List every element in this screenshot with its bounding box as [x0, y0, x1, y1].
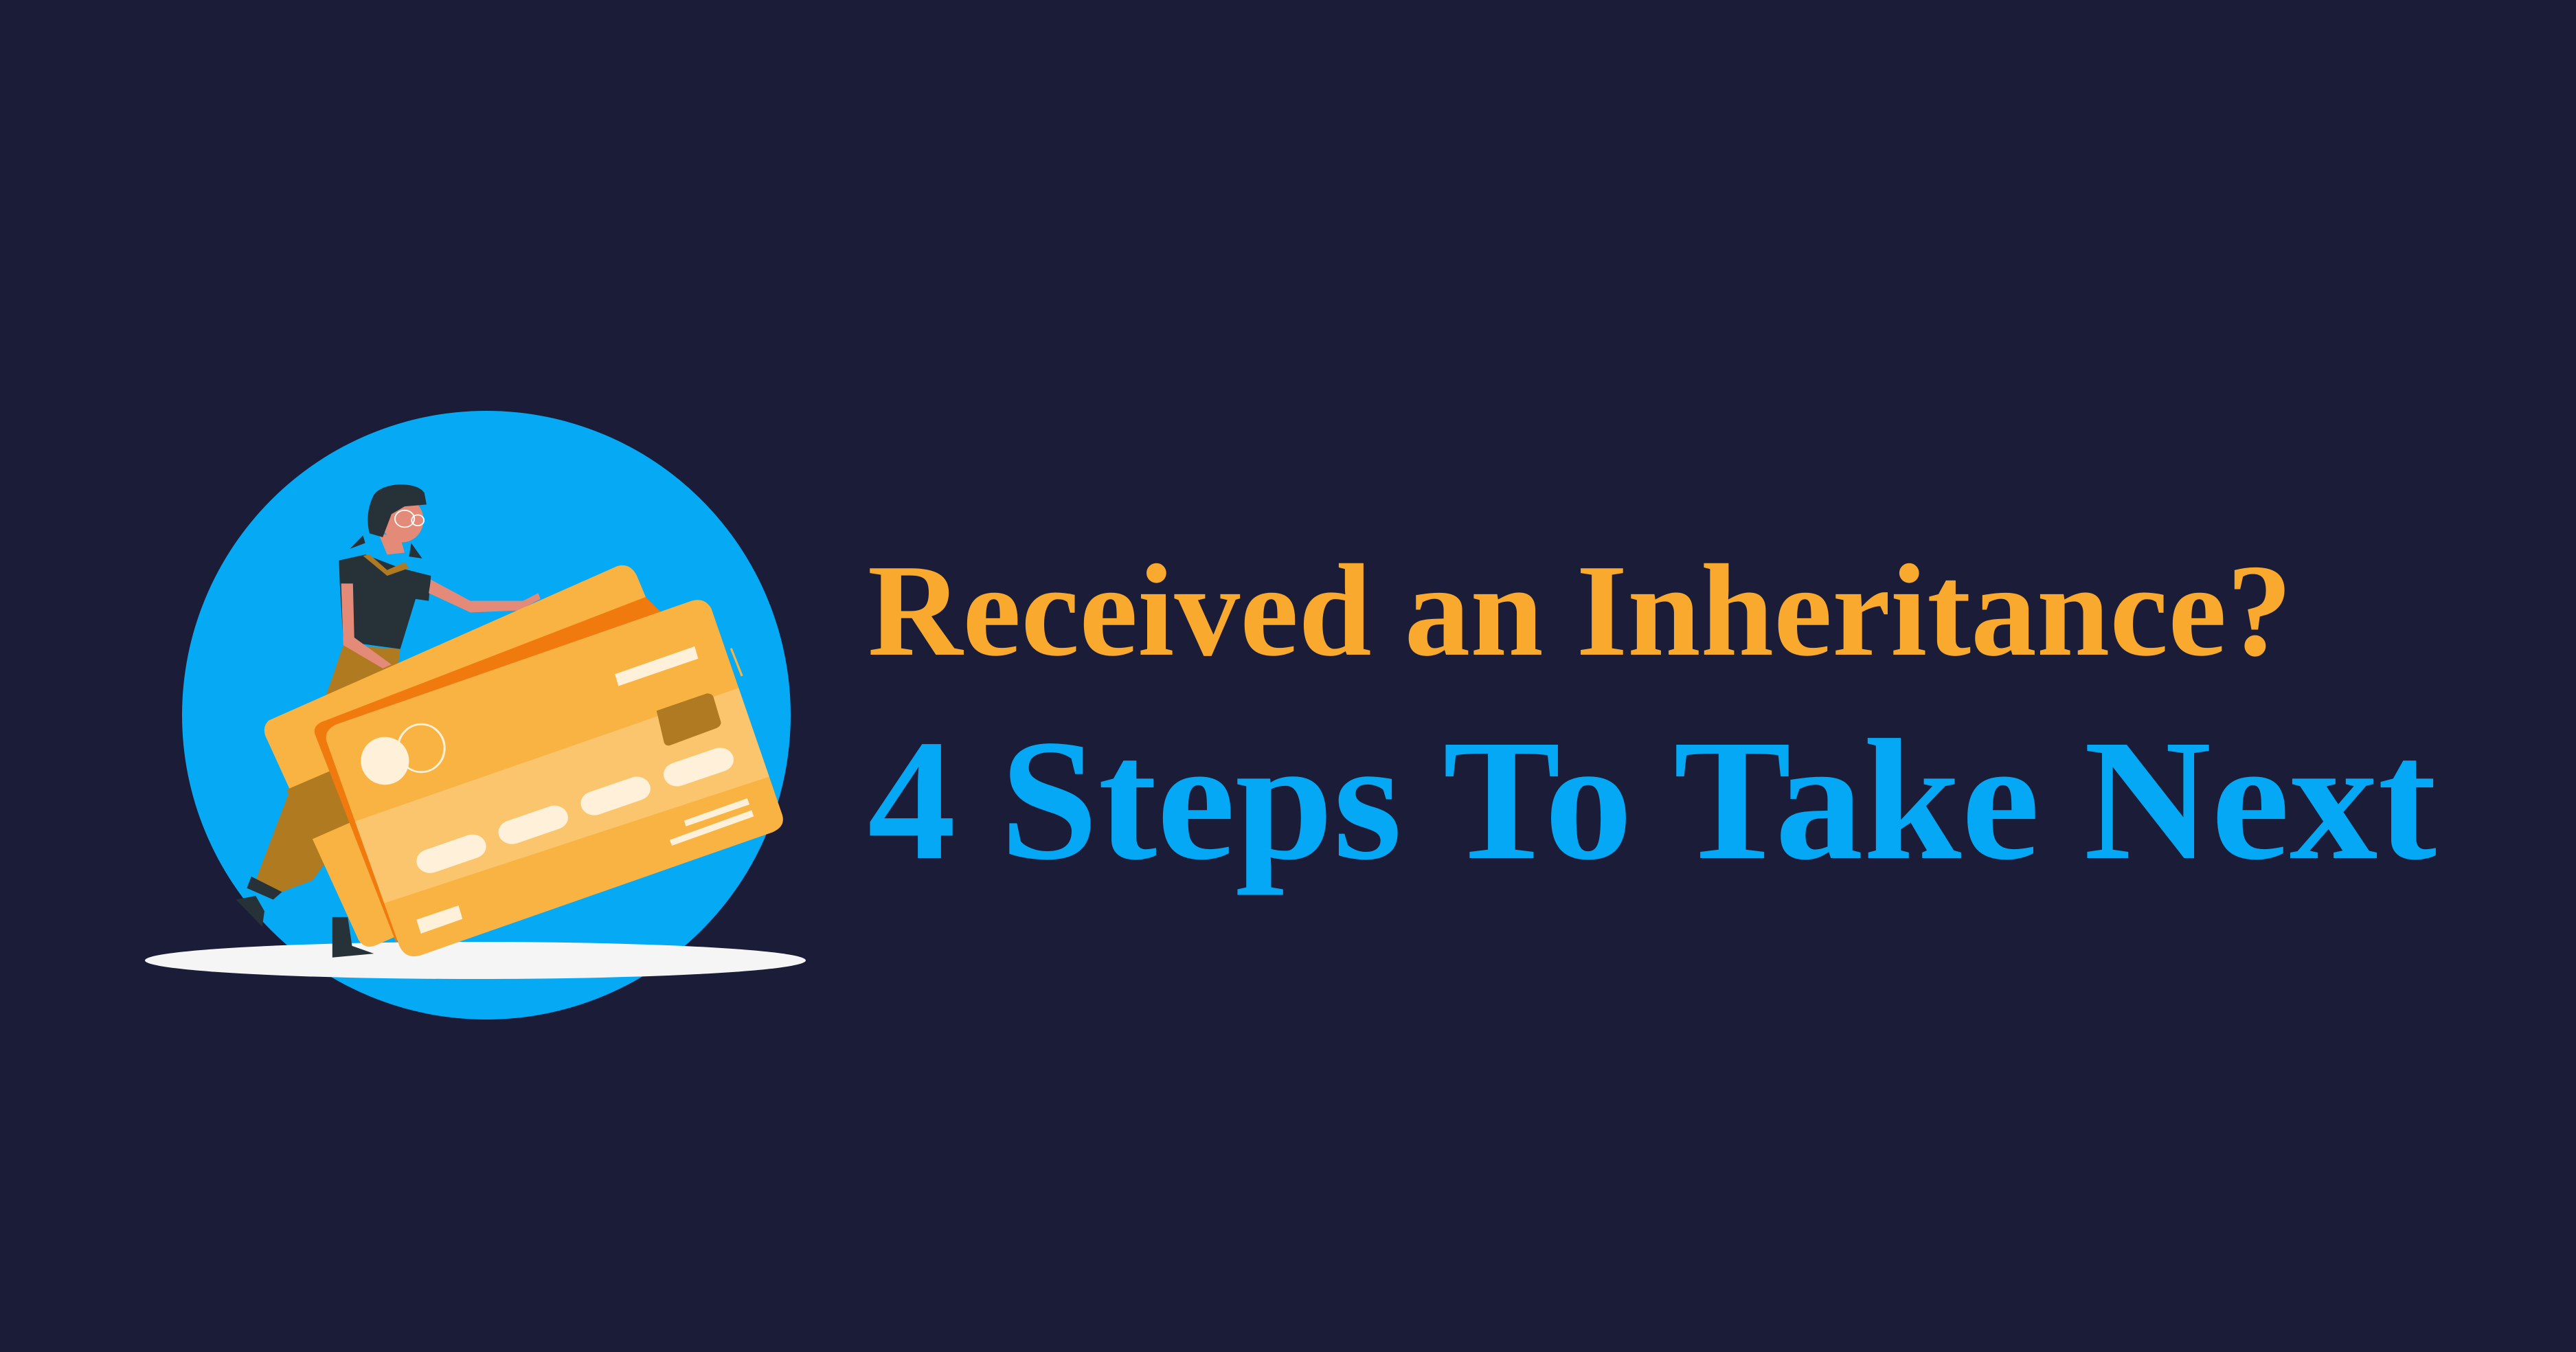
title line 1: Received an Inheritance?: [868, 537, 2292, 684]
blue circle background: [182, 411, 791, 1019]
illustration: woman pushing credit cards: [145, 411, 806, 1019]
card chip: [657, 693, 721, 745]
title line 2: 4 Steps To Take Next: [868, 703, 2437, 896]
card number dashes: [430, 760, 720, 861]
front credit card: [313, 597, 783, 956]
floor shadow ellipse: [145, 942, 806, 979]
woman figure: [236, 484, 541, 958]
card logo circles: [361, 737, 409, 785]
back credit card: [264, 565, 723, 947]
